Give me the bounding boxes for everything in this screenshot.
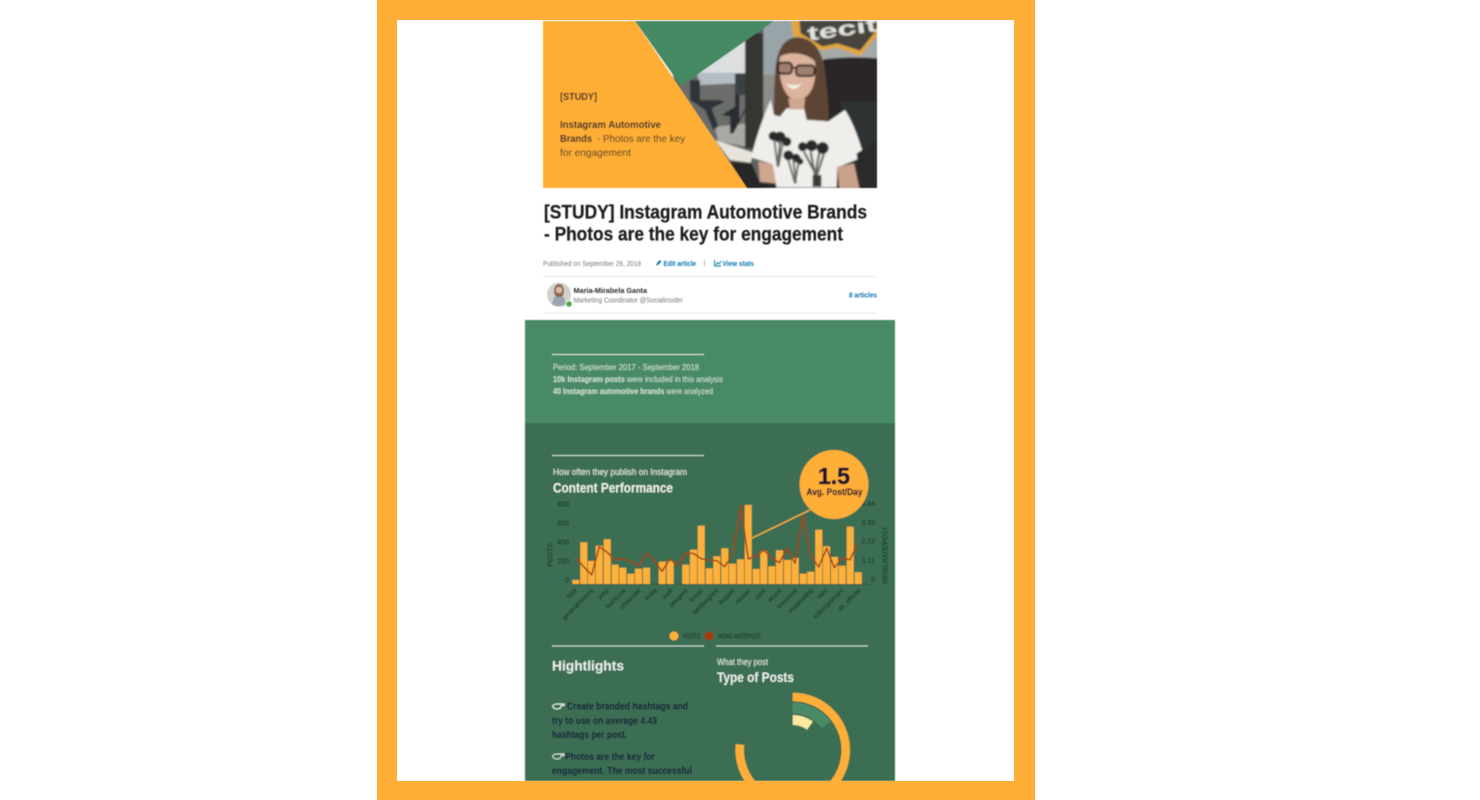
- white article sheet: [525, 14, 895, 800]
- left axis: 800: [557, 502, 569, 508]
- panel: study summary: 10k Instagram posts were included in this analysis: [553, 374, 723, 384]
- author row: 8 articles: [849, 290, 877, 300]
- highlight: hashtags: try to use on average 4.43: [552, 715, 657, 727]
- panel: study summary: 40 Instagram automotive brands were analyzed: [553, 386, 713, 396]
- heading: highlights: Hightlights: [552, 658, 624, 674]
- left axis: 0: [565, 578, 569, 584]
- brand labels: acura: [766, 587, 783, 604]
- cover photo: woman at desk: [673, 14, 887, 192]
- left axis: [548, 502, 569, 584]
- chart legend: %ENG.RATE/POST: [718, 634, 761, 640]
- banner caption: for engagement: [560, 147, 631, 159]
- right axis: 0: [871, 576, 875, 584]
- brand labels: tesla: [644, 587, 659, 602]
- panel: study summary: [525, 320, 895, 424]
- cover banner: [543, 14, 887, 192]
- left axis: 200: [557, 558, 569, 566]
- green banner triangle: [635, 21, 774, 86]
- publication meta row: Published on September 26, 2018: [543, 261, 641, 268]
- heading: type of posts: What they post: [717, 657, 768, 667]
- publication meta row: [543, 260, 754, 268]
- highlight: photos: engagement. The most successful: [552, 765, 692, 777]
- orange page frame: [377, 0, 1035, 800]
- author row: Maria-Mirabela Ganta: [574, 286, 648, 295]
- brand labels: lexususa: [776, 587, 799, 611]
- banner caption: Brands: [560, 133, 592, 145]
- brand labels: nissan: [734, 587, 753, 606]
- article title: [STUDY] Instagram Automotive Brands: [544, 202, 867, 224]
- left axis: POSTS: [548, 543, 554, 567]
- heading: type of posts: [717, 657, 794, 685]
- brand labels: bugatti: [718, 587, 736, 606]
- callout: average posts per day: [752, 450, 868, 538]
- brand labels: rollsroycecars: [812, 587, 846, 621]
- callout: average posts per day: 1.5: [818, 463, 850, 489]
- brand labels: ds_official: [837, 587, 863, 613]
- highlight: hashtags: hashtags per post.: [552, 729, 627, 741]
- highlight: photos: [552, 751, 692, 777]
- chart legend: [670, 632, 761, 640]
- left axis: 600: [557, 520, 569, 528]
- donut chart: [740, 697, 846, 800]
- brand labels: ferrari: [688, 587, 705, 604]
- brand labels: mini: [816, 587, 829, 601]
- highlight: hashtags: Create branded hashtags and: [567, 700, 688, 712]
- right axis: 3.33: [861, 520, 875, 527]
- highlight: photos: Photos are the key for: [565, 751, 655, 763]
- callout: average posts per day: Avg. Post/Day: [806, 487, 863, 498]
- brand labels: jeep: [596, 587, 611, 602]
- highlight: hashtags: [552, 700, 688, 741]
- right axis: 1.11: [862, 558, 875, 564]
- icon: chart: [714, 260, 721, 266]
- brand labels: [561, 587, 863, 622]
- posts bars: [572, 505, 862, 584]
- right axis: %ENG.RATE/POST: [882, 526, 890, 584]
- engagement rate line: [576, 506, 858, 575]
- brand labels: buickusa: [604, 587, 628, 611]
- cover photo: woman at desk: tecit: [806, 14, 879, 46]
- brand labels: ford: [566, 587, 579, 600]
- article title: - Photos are the key for engagement: [544, 224, 844, 246]
- author row: [547, 282, 877, 307]
- heading: content performance: [552, 455, 704, 496]
- brand labels: lamborghini: [692, 587, 720, 616]
- panel: type of posts: [715, 644, 869, 781]
- right axis: [861, 501, 890, 584]
- right axis: 2.22: [861, 538, 875, 546]
- banner caption: [560, 91, 686, 159]
- avatar: [547, 282, 572, 307]
- combo chart: posts and engagement rate: [548, 501, 890, 640]
- brand labels: opel: [754, 587, 768, 601]
- author row: Marketing Coordinator @Socialinsider: [574, 298, 684, 304]
- heading: content performance: How often they publish on Instagram: [553, 467, 687, 477]
- panel: highlights: [552, 646, 704, 777]
- heading: content performance: Content Performance: [553, 480, 673, 496]
- brand labels: audi: [661, 587, 674, 601]
- left axis: 400: [557, 540, 569, 546]
- article title: [544, 202, 867, 246]
- infographic canvas: [377, 0, 1035, 800]
- banner caption: [STUDY]: [560, 91, 597, 103]
- brand labels: peugeot: [668, 587, 690, 609]
- orange banner shape: [543, 21, 747, 188]
- brand labels: maseratihq: [787, 587, 815, 615]
- brand labels: chevrolet: [619, 587, 643, 611]
- panel: study summary: Period: September 2017 - September 2018: [553, 362, 699, 372]
- brand labels: generalmotors: [561, 587, 596, 622]
- orange frame bottom edge: [377, 781, 1035, 800]
- heading: type of posts: Type of Posts: [717, 670, 794, 685]
- chart legend: POSTS: [683, 634, 700, 640]
- banner caption: - Photos are the key: [597, 133, 686, 145]
- publication meta row: View stats: [722, 261, 754, 268]
- publication meta row: Edit article: [664, 261, 696, 268]
- banner caption: Instagram Automotive: [560, 119, 661, 131]
- icon: pencil: [656, 260, 662, 266]
- panel: results: [525, 423, 895, 800]
- right axis: 4.44: [861, 501, 875, 508]
